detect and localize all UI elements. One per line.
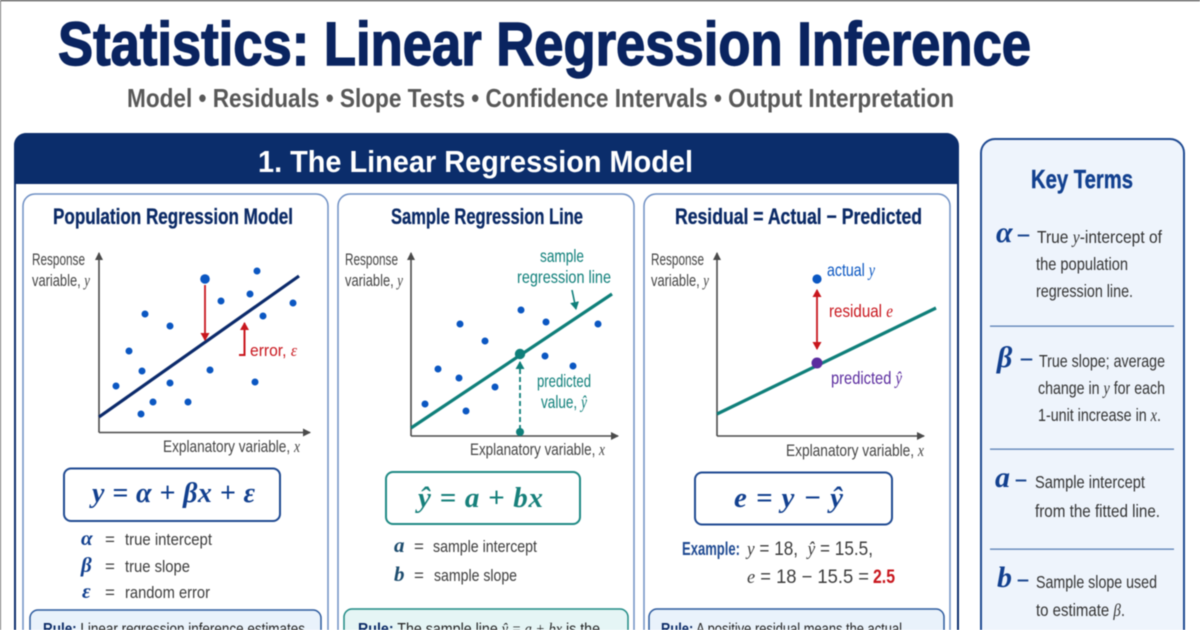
- scatter chart: population: error, ε: [250, 341, 297, 360]
- panel heading: Sample Regression Line: [391, 204, 583, 229]
- worked example: [682, 539, 895, 588]
- subtitle: Model • Residuals • Slope Tests • Confidence Intervals • Output Interpretation: [127, 83, 954, 113]
- symbol definitions: population: random error: [125, 583, 210, 602]
- term: alpha: regression line.: [1036, 281, 1133, 301]
- residual chart: predicted ŷ: [831, 368, 902, 388]
- scatter chart: sample: predicted: [537, 371, 591, 391]
- formula box: residual: [695, 472, 892, 524]
- symbol definitions: population: =: [105, 583, 115, 602]
- scatter chart: sample: variable, y: [345, 271, 404, 290]
- scatter chart: sample: [345, 246, 618, 459]
- term: a: a: [995, 461, 1010, 494]
- scatter chart: sample: value, ŷ: [541, 392, 587, 412]
- panel: population regression model: [23, 194, 328, 630]
- term: alpha: –: [1017, 224, 1030, 246]
- scatter chart: sample: Explanatory variable, x: [470, 440, 606, 459]
- worked example: e = 18 − 15.5 =: [747, 567, 869, 588]
- term: b: [997, 561, 1157, 620]
- term: beta: 1-unit increase in x.: [1038, 405, 1161, 425]
- formula box: sample line: ŷ = a + bx: [415, 482, 543, 514]
- section heading: 1. The Linear Regression Model: [258, 144, 693, 179]
- symbol definitions: population: [80, 526, 212, 603]
- title: Statistics: Linear Regression Inference: [58, 10, 1031, 78]
- residual chart: Explanatory variable, x: [786, 441, 925, 460]
- term: b: –: [1017, 569, 1029, 591]
- residual chart: variable, y: [651, 271, 710, 290]
- panel heading: Population Regression Model: [53, 204, 293, 229]
- term: alpha: True y-intercept of: [1037, 227, 1162, 247]
- key terms heading: Key Terms: [1031, 164, 1133, 194]
- term: alpha: α: [996, 216, 1013, 249]
- term: alpha: the population: [1036, 254, 1128, 274]
- panel: key terms: [981, 139, 1184, 630]
- term: b: Sample slope used: [1036, 572, 1157, 592]
- symbol definitions: sample: =: [414, 537, 424, 556]
- scatter chart: population: Explanatory variable, x: [163, 437, 301, 456]
- term: a: Sample intercept: [1035, 472, 1145, 492]
- worked example: y = 18, ŷ = 15.5,: [745, 539, 873, 560]
- term: b: to estimate β.: [1036, 600, 1125, 620]
- residual chart: Response: [651, 251, 704, 269]
- term: beta: change in y for each: [1038, 378, 1165, 398]
- rule callout: sample: [344, 609, 628, 630]
- term: beta: True slope; average: [1039, 351, 1165, 371]
- symbol definitions: sample: b: [394, 562, 404, 586]
- symbol definitions: population: true intercept: [125, 530, 212, 549]
- term: b: b: [997, 561, 1012, 594]
- formula box: sample line: [386, 472, 580, 524]
- symbol definitions: population: α: [81, 526, 93, 550]
- symbol definitions: sample: sample slope: [434, 566, 517, 585]
- symbol definitions: population: true slope: [125, 557, 190, 576]
- panel: sample regression line: [338, 194, 634, 630]
- symbol definitions: sample: =: [414, 566, 424, 585]
- scatter chart: sample: sample: [540, 246, 584, 266]
- symbol definitions: sample: sample intercept: [433, 537, 537, 556]
- residual chart: [651, 251, 936, 460]
- scatter chart: sample: Response: [345, 251, 398, 269]
- rule callout: residual: [649, 609, 944, 630]
- term: beta: –: [1020, 348, 1033, 370]
- formula box: residual: e = y − ŷ: [734, 482, 843, 514]
- section header bar: [14, 133, 958, 184]
- term: beta: [996, 341, 1165, 425]
- symbol definitions: population: β: [80, 553, 92, 577]
- scatter chart: population: variable, y: [32, 271, 91, 290]
- scatter chart: sample: regression line: [517, 267, 611, 287]
- formula box: population model: y = α + βx + ε: [89, 478, 256, 509]
- scatter chart: population: [32, 251, 310, 456]
- panel heading: Residual = Actual − Predicted: [675, 204, 922, 229]
- formula box: population model: [64, 468, 280, 521]
- section 1: the linear regression model: [14, 133, 958, 630]
- residual chart: residual e: [829, 301, 893, 321]
- symbol definitions: population: =: [105, 557, 115, 576]
- scatter chart: population: Response: [32, 251, 85, 269]
- worked example: Example:: [682, 539, 740, 559]
- rule callout: population: [30, 610, 321, 630]
- panel: residual: [644, 194, 950, 630]
- term: a: [995, 461, 1160, 521]
- symbol definitions: population: ε: [82, 579, 91, 603]
- term: beta: β: [996, 341, 1013, 374]
- term: a: –: [1015, 469, 1027, 491]
- term: alpha: [996, 216, 1162, 301]
- symbol definitions: sample: [394, 533, 537, 586]
- residual chart: actual y: [827, 260, 875, 280]
- term: a: from the fitted line.: [1035, 501, 1160, 521]
- worked example: 2.5: [873, 567, 895, 588]
- symbol definitions: population: =: [105, 530, 115, 549]
- symbol definitions: sample: a: [394, 533, 404, 557]
